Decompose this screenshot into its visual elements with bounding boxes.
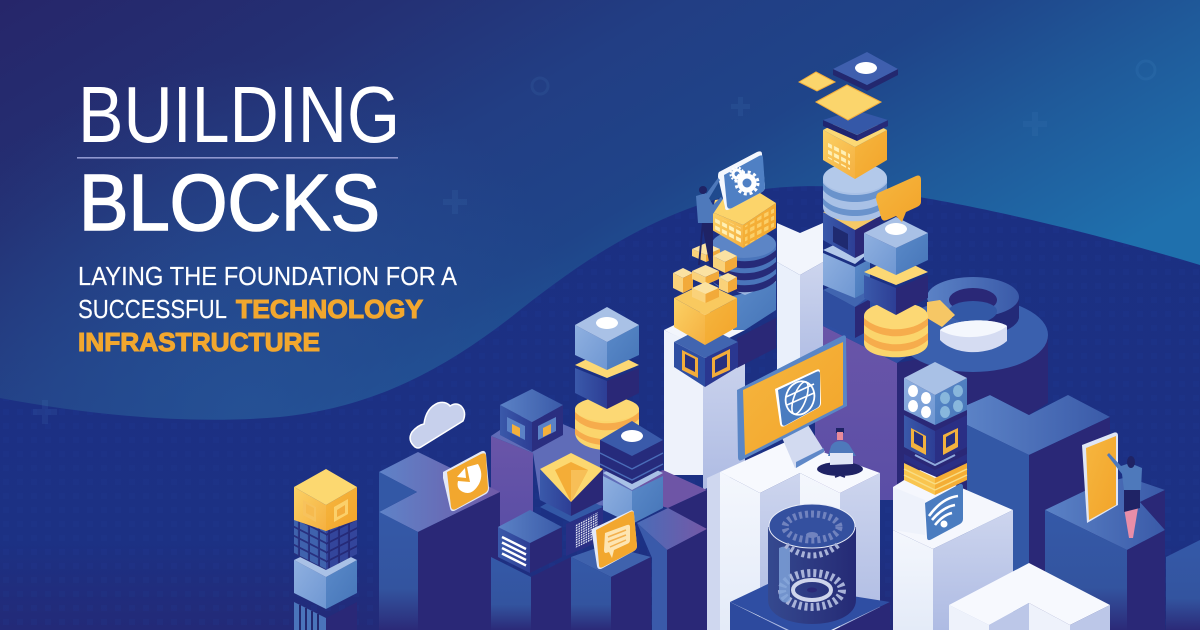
subtitle: LAYING THE FOUNDATION FOR A	[78, 261, 458, 291]
gold top cube	[294, 469, 357, 531]
icon: pie chart badge	[443, 451, 489, 511]
block: far right tower	[1166, 540, 1200, 630]
pale cube	[294, 545, 357, 609]
icon: cloud	[410, 402, 465, 448]
pale dot cube	[575, 307, 639, 370]
faint background symbols	[33, 61, 1155, 424]
block: central white tower	[707, 440, 880, 630]
subtitle highlight: TECHNOLOGY	[236, 294, 423, 324]
chat bubble	[876, 176, 921, 222]
monitor stand	[780, 425, 825, 468]
monitor	[737, 335, 847, 468]
gold cylinder	[575, 397, 639, 450]
pale cube	[603, 458, 663, 524]
gold segment	[927, 300, 955, 327]
gear badge	[718, 151, 765, 210]
navy plate	[823, 110, 888, 141]
blue base cube	[674, 326, 738, 387]
block: blue L-shape tower	[379, 452, 500, 630]
pale block	[823, 240, 870, 298]
blue dot plate	[833, 52, 898, 91]
white segment	[940, 320, 1007, 352]
woman at tablet	[1107, 453, 1142, 538]
gear below lid	[786, 545, 838, 556]
icon: wifi badge	[925, 484, 963, 540]
data cylinder	[823, 163, 887, 221]
navy cube with gold plate	[575, 349, 639, 409]
title block	[77, 70, 458, 357]
block: wifi white tower	[893, 470, 1013, 630]
gold data cube	[823, 113, 887, 179]
small gold cubes	[673, 243, 737, 303]
block: purple tower	[815, 290, 1048, 500]
left cube	[673, 268, 693, 293]
disc	[898, 298, 1048, 372]
title: BUILDING: BUILDING	[78, 70, 400, 159]
gem box	[540, 453, 603, 516]
tower: white back tower	[777, 223, 823, 375]
center cube	[692, 265, 719, 285]
stack: right stack with chat bubble	[864, 176, 928, 357]
plate	[904, 454, 967, 476]
small gold plate	[799, 72, 835, 91]
title rule	[77, 157, 398, 159]
gold plate	[816, 85, 881, 120]
navy cube	[737, 318, 776, 368]
block stack base	[823, 280, 870, 338]
donut chart on disc	[898, 277, 1048, 372]
block: right L-shaped blue tower	[967, 395, 1110, 630]
subtitle: SUCCESSFUL	[78, 294, 227, 324]
qr block	[540, 490, 603, 556]
dark wave	[0, 186, 1200, 630]
stack: tall stack with plates and cubes	[799, 52, 898, 338]
stack: gold gem box	[540, 453, 603, 556]
monitor frame	[737, 335, 847, 461]
wave grid pattern	[0, 186, 1200, 630]
lower gear	[782, 573, 842, 607]
subtitle highlight: INFRASTRUCTURE	[78, 327, 320, 357]
navy bracket cube	[904, 415, 967, 463]
navy cube with gold top	[864, 256, 928, 315]
upper lid	[769, 504, 855, 548]
title: BLOCKS: BLOCKS	[79, 158, 380, 247]
right low cube	[719, 273, 737, 293]
stack: left gold cube stack	[294, 469, 357, 630]
back cube	[692, 243, 720, 262]
striped cylinder	[712, 230, 776, 292]
cube: lines	[498, 510, 562, 573]
stack: navy cylinder and blocks	[712, 151, 776, 368]
navy window cube	[823, 205, 880, 258]
pale four-dot cube	[904, 362, 967, 425]
icon: chat badge	[592, 510, 637, 569]
blocks: front blue pillars	[491, 508, 707, 630]
right top cube	[713, 250, 737, 273]
stack: plates over pale cube	[600, 421, 663, 524]
donut ring	[927, 277, 1019, 335]
gold stripes	[904, 463, 967, 495]
brick cube	[294, 512, 357, 570]
icon: gears cylinder on platform	[730, 504, 890, 630]
plate layers	[600, 421, 663, 484]
large gold cube	[674, 283, 737, 345]
block: tablet tower	[1045, 477, 1165, 630]
pale dot cube	[864, 217, 928, 275]
cube: navy with gold windows	[500, 389, 563, 452]
striped base	[294, 602, 357, 630]
gold grid cube	[712, 193, 776, 248]
stack: gold cubes and blue base	[673, 178, 738, 387]
cylinder body	[768, 527, 856, 624]
block: purple platform	[491, 410, 707, 630]
tower: white pillar under person	[664, 310, 745, 490]
monitor screen	[743, 342, 843, 455]
person reaching	[696, 178, 723, 267]
upper gear	[785, 514, 839, 540]
pale blue block	[733, 272, 776, 330]
platform	[730, 583, 890, 630]
stack: tall gold cylinder stack	[575, 307, 639, 450]
block: bottom white tower	[949, 563, 1110, 630]
stack: icon cubes	[904, 362, 967, 495]
icon: tablet	[1082, 432, 1118, 523]
front cube	[692, 282, 719, 303]
person with laptop	[817, 428, 863, 477]
globe badge	[775, 369, 821, 427]
glass highlight	[779, 546, 790, 603]
gold cylinder	[864, 302, 928, 357]
